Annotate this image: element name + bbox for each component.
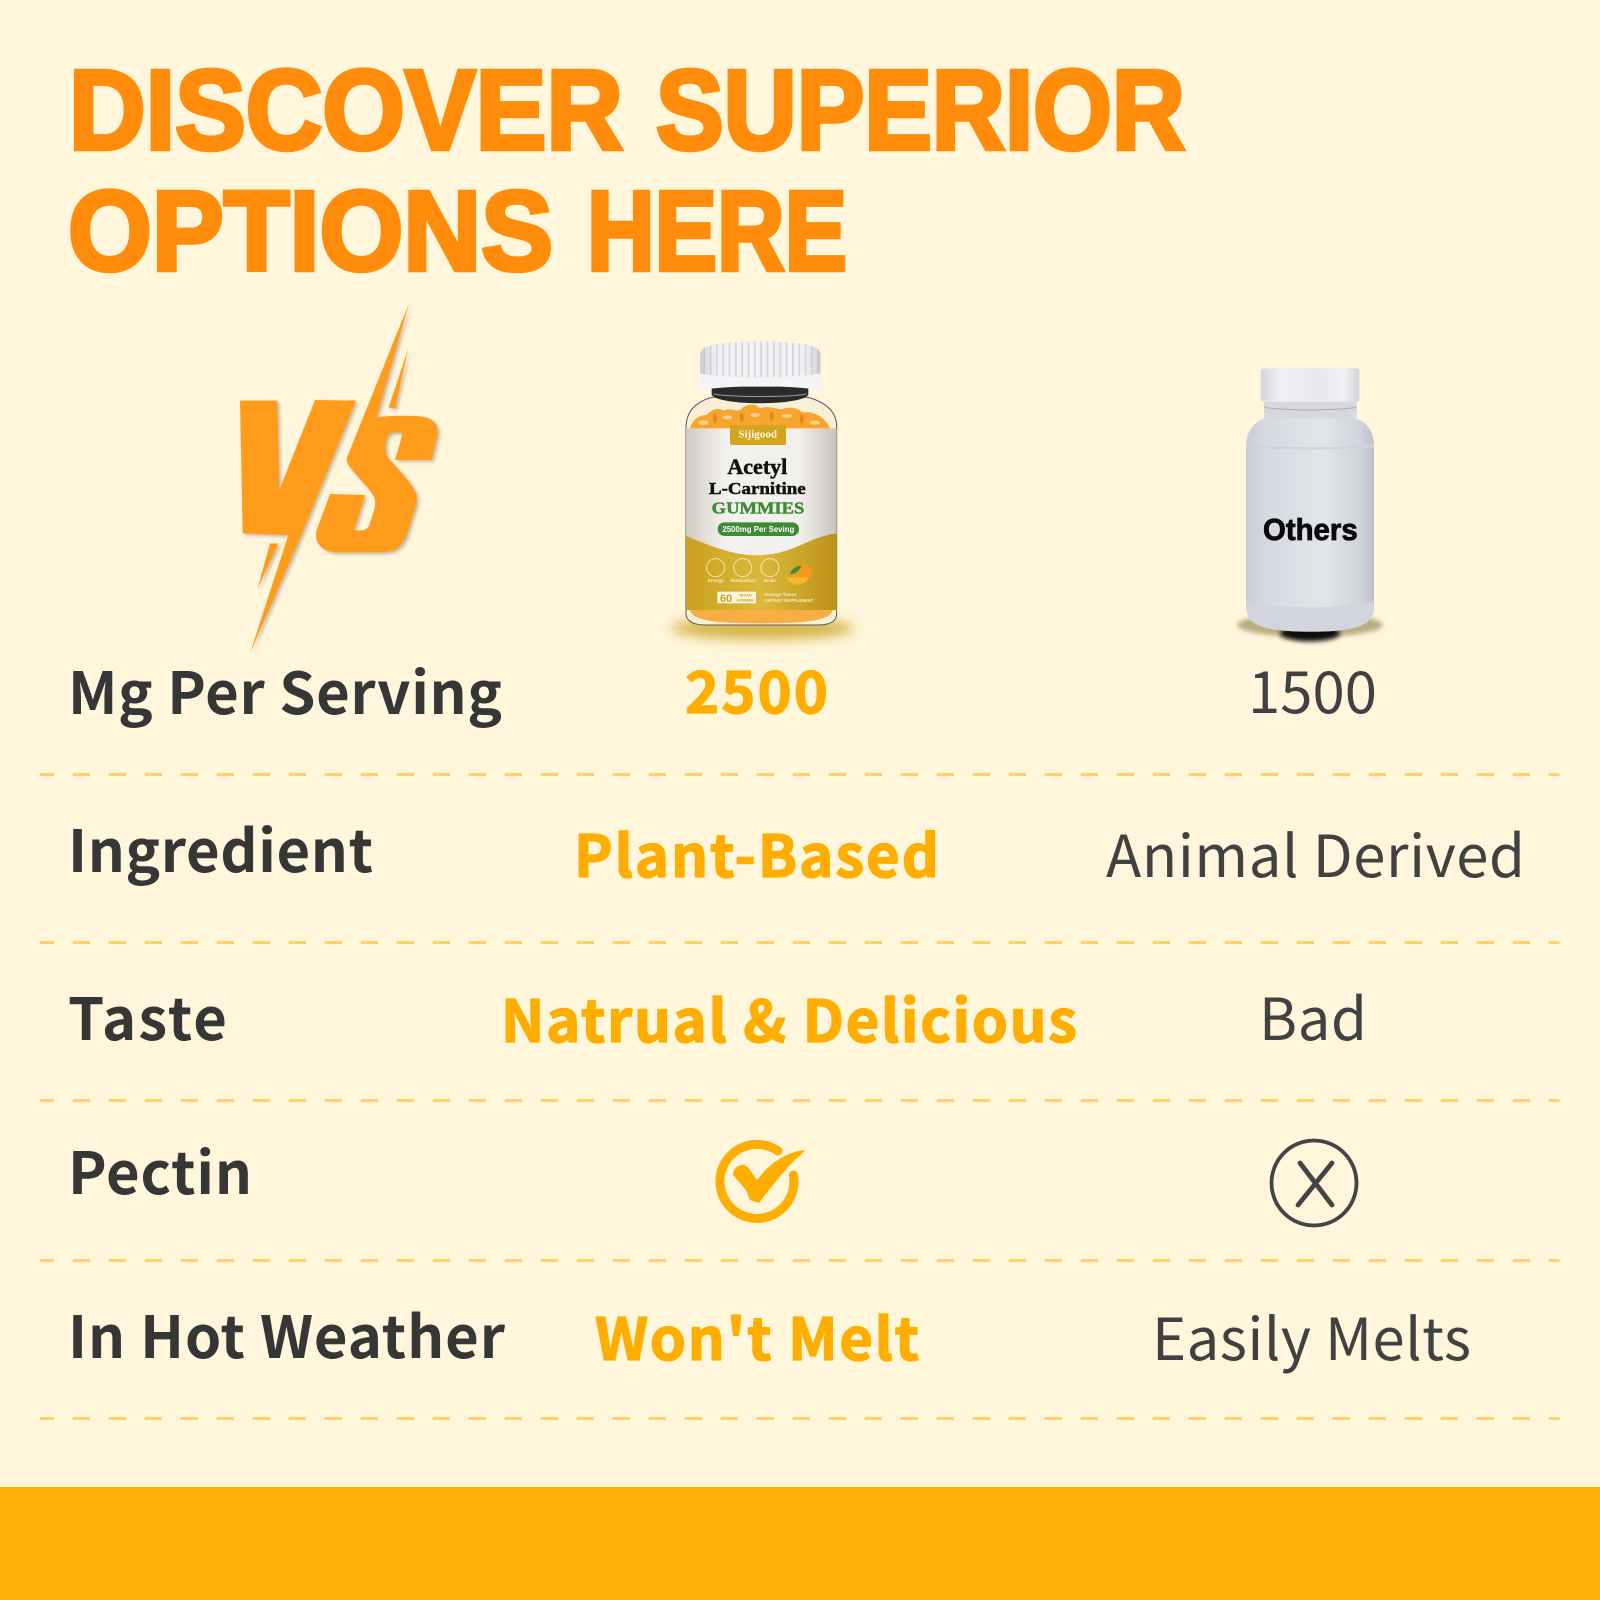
product: Sijigood bottle xyxy=(671,342,854,640)
row: mg per serving xyxy=(68,646,1377,731)
row: taste: Natrual & Delicious xyxy=(501,975,1077,1059)
row: ingredient xyxy=(68,805,1525,894)
row: in hot weather: In Hot Weather xyxy=(68,1291,506,1375)
product: Sijigood bottle: L-Carnitine xyxy=(709,479,806,498)
icon: grey x mark xyxy=(1272,1140,1356,1226)
product: Sijigood bottle: GUMMIES xyxy=(736,599,754,603)
bottom band xyxy=(0,1487,1600,1600)
row: taste xyxy=(68,973,1367,1059)
row: in hot weather: Easily Melts xyxy=(1152,1293,1471,1377)
row: in hot weather: Won't Melt xyxy=(595,1293,919,1377)
row: ingredient: Ingredient xyxy=(68,805,373,889)
product: Sijigood bottle: Energy xyxy=(708,578,724,583)
title xyxy=(68,47,1185,294)
title: SUPERIOR xyxy=(656,47,1185,173)
product: Sijigood bottle: DIETARY SUPPLEMENT xyxy=(764,598,814,603)
product: Sijigood bottle: Brain xyxy=(764,578,776,583)
product: Others bottle xyxy=(1237,368,1383,641)
product: Sijigood bottle: 60 xyxy=(720,593,732,605)
title: DISCOVER xyxy=(69,47,623,173)
product: Sijigood bottle: 2500mg Per Seving xyxy=(722,525,794,534)
title: OPTIONS xyxy=(68,168,553,294)
row: mg per serving: 1500 xyxy=(1248,646,1377,730)
row: mg per serving: Mg Per Serving xyxy=(68,647,502,731)
product: Sijigood bottle: Acetyl xyxy=(727,454,787,479)
row: mg per serving: 2500 xyxy=(685,646,828,730)
product: Sijigood bottle: Sijigood xyxy=(738,429,777,440)
product: Sijigood bottle: Orange flavor xyxy=(764,592,797,598)
row: in hot weather xyxy=(68,1291,1471,1377)
gummies: bottom xyxy=(690,610,833,623)
row: pectin xyxy=(68,1127,1356,1226)
row: ingredient: Animal Derived xyxy=(1106,810,1525,894)
row: taste: Bad xyxy=(1259,973,1367,1057)
row: ingredient: Plant-Based xyxy=(574,810,939,894)
gummies: top xyxy=(690,404,831,429)
icon: orange check mark xyxy=(720,1144,805,1218)
product: Sijigood bottle: GUMMIES xyxy=(712,498,804,517)
row: taste: Taste xyxy=(68,973,227,1057)
product: Sijigood bottle: Metabolism xyxy=(731,578,756,583)
row: pectin: Pectin xyxy=(68,1127,252,1211)
icon: VS lightning badge xyxy=(240,303,438,653)
product: Sijigood bottle: VEGAN xyxy=(738,594,752,598)
product: Others bottle: Others xyxy=(1263,513,1358,547)
title: HERE xyxy=(587,168,847,294)
